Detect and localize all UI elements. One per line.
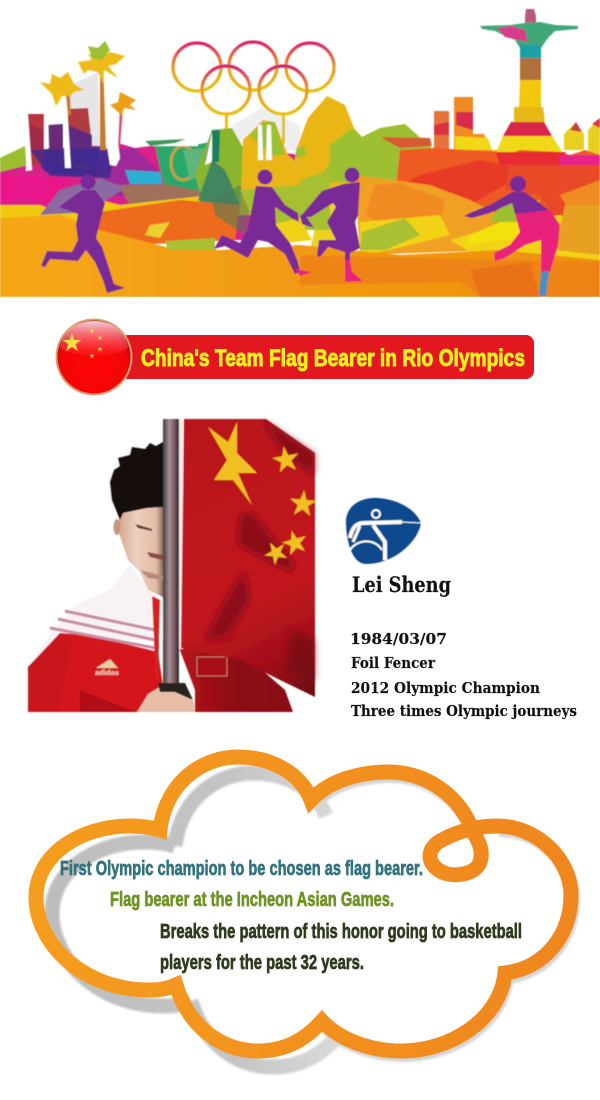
right colour band: [396, 147, 600, 216]
Christ the Redeemer: [480, 9, 578, 153]
athlete facts: Three times Olympic journeys: [351, 703, 577, 720]
flag stars: [208, 422, 317, 567]
runner 3: [300, 168, 363, 282]
cloud text line 2: Flag bearer at the Incheon Asian Games.: [110, 889, 394, 911]
cloud shadow: [52, 773, 337, 1067]
neck and face: [118, 505, 163, 597]
hand: [137, 685, 195, 712]
centre orange patches: [95, 200, 240, 245]
portrait: athlete holding the flag: [28, 419, 317, 712]
title banner: [56, 318, 534, 396]
buildings: [28, 114, 44, 165]
cloud outline: [36, 757, 571, 1051]
hair: [110, 442, 163, 520]
red flag: [181, 419, 315, 697]
athlete name: Lei Sheng: [352, 572, 451, 597]
athlete facts: 1984/03/07: [350, 631, 447, 648]
Olympic rings: [173, 42, 334, 114]
runner 2: [214, 170, 312, 276]
hero banner: Rio skyline and runners: [0, 9, 600, 297]
flag on chest: [197, 657, 227, 676]
palm trees: [40, 41, 136, 150]
runner 4: [464, 176, 560, 296]
white gaps between buildings: [26, 115, 32, 171]
Sugarloaf and green hill: [294, 95, 498, 188]
athlete facts: Foil Fencer: [351, 655, 435, 672]
jacket right side: [178, 645, 293, 712]
left hill: [0, 146, 27, 172]
jacket stripes: [50, 611, 155, 648]
banner bar: [120, 335, 534, 379]
runner 1: [41, 174, 125, 293]
athlete facts: [350, 631, 577, 720]
main colour mass: [0, 140, 300, 240]
athlete facts: 2012 Olympic Champion: [351, 680, 540, 697]
right chapel and tower: [564, 123, 584, 150]
icon: Rio wheelchair fencing pictogram: [346, 498, 421, 564]
flagpole: [163, 419, 179, 684]
mid yellow-orange area: [355, 175, 500, 255]
central green and volcano: [195, 128, 250, 215]
cloud text line 1: First Olympic champion to be chosen as flag bearer.: [60, 858, 423, 880]
cloud callout: [36, 757, 573, 1067]
jacket white shoulders: [28, 565, 163, 665]
gray backdrop behind palms: [70, 72, 100, 146]
jacket red body: [28, 633, 163, 712]
adidas logo: adidas: [95, 670, 119, 677]
icon: China flag globe: [56, 318, 132, 396]
adidas logo: [95, 659, 119, 677]
ground: [0, 215, 600, 297]
right buildings: [434, 111, 449, 150]
flag shading marks: [205, 419, 315, 680]
cloud text line 4: players for the past 32 years.: [160, 952, 364, 974]
